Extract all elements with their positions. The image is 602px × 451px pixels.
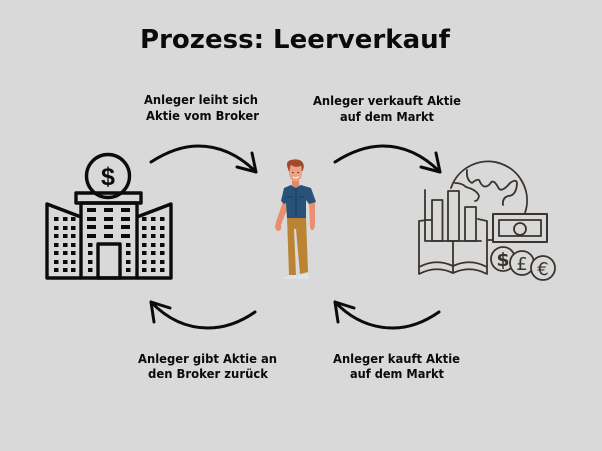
open book [419,219,487,274]
arrow: broker to investor [151,146,256,172]
label: borrow share [144,93,259,123]
face [292,172,299,174]
globe [451,161,527,213]
shirt [281,185,316,218]
dollar sign: $ [101,163,115,191]
label: sell share: Anleger verkauft Aktie [313,94,461,108]
label: buy share [333,352,460,381]
title: Prozess: Leerverkauf [140,25,451,55]
coins [491,247,515,271]
hair [287,159,304,172]
label: buy share: auf dem Markt [350,367,444,381]
arms [275,199,288,231]
coin symbols: £ [516,254,528,275]
shoes [282,274,308,279]
label: return share [138,352,277,381]
label: sell share: auf dem Markt [340,110,434,124]
arrow: investor to market [335,146,440,172]
banknote [493,214,547,242]
arrow: market to investor [335,302,439,328]
trousers [287,217,308,275]
label: borrow share: Anleger leiht sich [144,93,258,107]
label: return share: Anleger gibt Aktie an [138,352,277,366]
building windows [54,208,164,272]
arrow: investor back to broker [151,302,255,328]
icon: global market [419,161,555,280]
bar chart [425,190,481,241]
neck and head [292,180,299,188]
label: borrow share: Aktie vom Broker [146,109,259,123]
label: buy share: Anleger kauft Aktie [333,352,460,366]
coin symbols: € [537,259,549,280]
label: sell share [313,94,461,124]
label: return share: den Broker zurück [148,367,269,381]
coin symbols: $ [496,249,510,271]
coin symbols [496,249,549,280]
icon: investor figure [275,159,316,279]
icon: bank building [47,154,171,278]
